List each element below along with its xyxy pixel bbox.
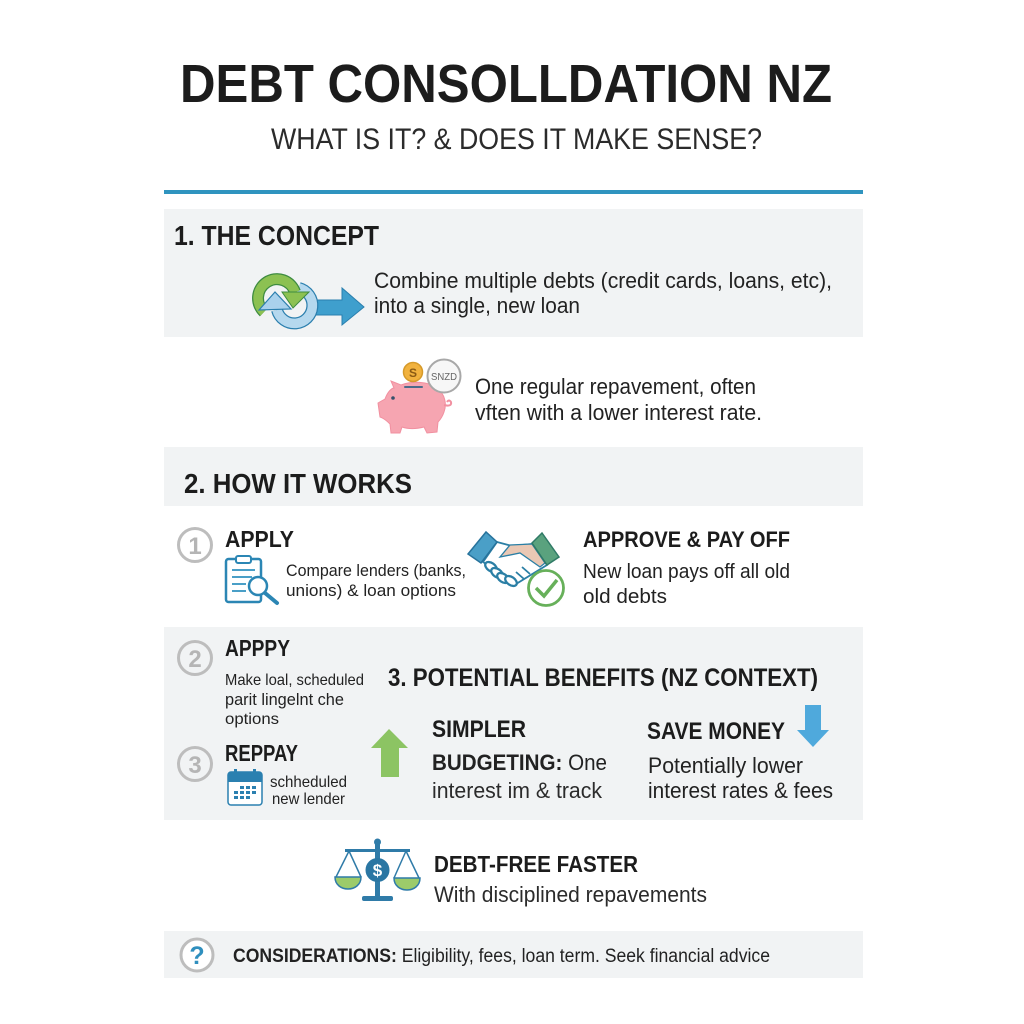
- text: apply description: [286, 561, 466, 600]
- benefit: save money: Potentially lower: [648, 753, 803, 778]
- text: single repayment: One regular repavement, often: [475, 374, 756, 399]
- icon: clipboard with magnifier: [226, 556, 277, 603]
- text: concept description: [374, 268, 832, 318]
- step 3: 3: [188, 752, 202, 779]
- step: approve and pay off: old debts: [583, 586, 667, 608]
- subtitle: WHAT IS IT? & DOES IT MAKE SENSE?: [271, 123, 762, 156]
- title: DEBT CONSOLLDATION NZ: [180, 54, 832, 114]
- heading: the concept: 1. THE CONCEPT: [174, 220, 379, 251]
- icon: question mark: ?: [189, 942, 205, 970]
- text: concept description: into a single, new loan: [374, 293, 580, 318]
- benefit: save money: [647, 718, 833, 803]
- step 2: APPPY: [225, 635, 290, 661]
- step 2: options: [225, 711, 279, 728]
- icon: piggy bank with coins: S: [409, 366, 417, 380]
- benefit: simpler budgeting: interest im & track: [432, 778, 603, 803]
- step 3: [178, 740, 347, 808]
- benefit: simpler budgeting: BUDGETING: One: [432, 750, 607, 775]
- benefit: simpler budgeting: SIMPLER: [432, 716, 526, 743]
- step: approve and pay off: New loan pays off all old: [583, 561, 790, 583]
- step 3: schheduled: [270, 774, 347, 791]
- text: apply description: unions) & loan options: [286, 581, 456, 600]
- step: approve and pay off: APPROVE & PAY OFF: [583, 527, 790, 552]
- icon: piggy bank with coins: [378, 360, 460, 433]
- benefit: debt-free faster: With disciplined repavements: [434, 882, 707, 907]
- icon: merge arrows: [258, 279, 364, 325]
- text: single repayment: [475, 374, 762, 425]
- icon: handshake with check: [468, 532, 564, 606]
- icon: calendar: [228, 769, 262, 805]
- icon: balance scale: [335, 838, 420, 901]
- step 2: Make loal, scheduled: [225, 672, 364, 689]
- benefit: save money: SAVE MONEY: [647, 718, 785, 745]
- benefit: save money: interest rates & fees: [648, 778, 833, 803]
- step 2: parit lingelnt che: [225, 690, 344, 709]
- step 1: apply: [178, 526, 466, 603]
- text: single repayment: vften with a lower interest rate.: [475, 400, 762, 425]
- text: considerations: CONSIDERATIONS: Eligibility, fees, loan term. Seek financial advice: [233, 946, 770, 967]
- step 3: REPPAY: [225, 740, 298, 766]
- panel: considerations: [164, 931, 863, 978]
- panel: steps and potential benefits: [164, 627, 863, 820]
- panel: how it works heading: [164, 447, 863, 506]
- badge: 1: 1: [188, 533, 202, 560]
- benefit: debt-free faster: [434, 851, 707, 907]
- benefit: debt-free faster: DEBT-FREE FASTER: [434, 851, 638, 877]
- panel: how it works heading: 2. HOW IT WORKS: [184, 468, 412, 499]
- icon: question mark: [181, 939, 213, 971]
- icon: piggy bank with coins: SNZD: [431, 372, 457, 383]
- heading: apply: APPLY: [225, 526, 294, 552]
- step 2: 2: [188, 646, 202, 673]
- step 3: new lender: [272, 791, 346, 808]
- step 2: [178, 635, 364, 728]
- text: concept description: Combine multiple debts (credit cards, loans, etc),: [374, 268, 832, 293]
- panel: the concept: [164, 209, 863, 337]
- badge: 1: [178, 528, 212, 562]
- icon: blue down arrow: [797, 705, 829, 747]
- benefit: simpler budgeting: [432, 716, 607, 803]
- heading: potential benefits: 3. POTENTIAL BENEFITS (NZ CONTEXT): [388, 664, 818, 692]
- text: apply description: Compare lenders (banks,: [286, 561, 466, 580]
- icon: green up arrow: [371, 729, 408, 777]
- icon: balance scale: $: [373, 861, 383, 880]
- step: approve and pay off: [583, 527, 790, 608]
